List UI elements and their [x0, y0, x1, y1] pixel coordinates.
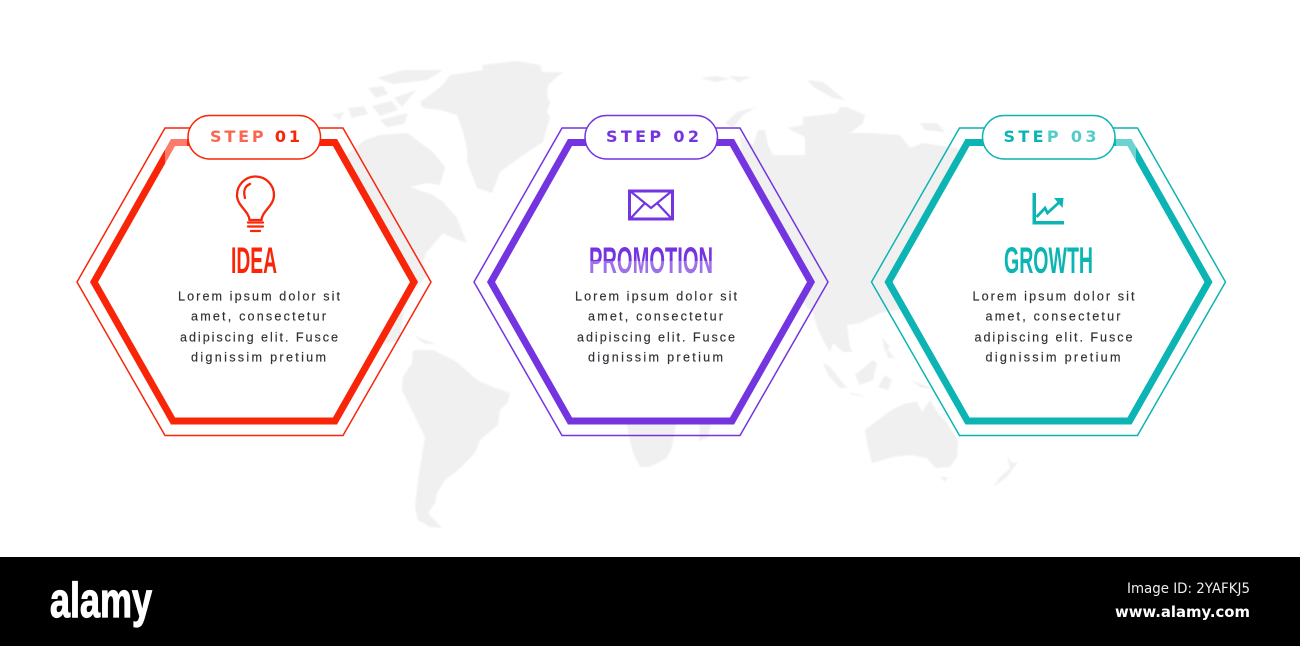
description text: amet, consectetur: [588, 310, 723, 324]
description text: adipiscing elit. Fusce: [974, 330, 1132, 344]
description text: Lorem ipsum dolor sit: [972, 290, 1135, 304]
description text: [972, 290, 1135, 364]
outer hexagon outline: [77, 128, 431, 436]
description text: Lorem ipsum dolor sit: [575, 290, 738, 304]
panel: step 02 promotion: [474, 116, 828, 436]
panel: step 03 growth: [872, 116, 1226, 436]
step pill: STEP 03: [1004, 127, 1096, 146]
description text: amet, consectetur: [191, 310, 326, 324]
description text: Lorem ipsum dolor sit: [178, 290, 340, 304]
footer bar: [0, 557, 1300, 646]
inner hexagon frame: [94, 142, 414, 421]
step pill: STEP 01: [210, 127, 300, 146]
alamy logo: alamy: [50, 574, 152, 628]
description text: dignissim pretium: [986, 350, 1120, 364]
watermark fade overlays: [165, 128, 1136, 275]
website: www.alamy.com: [1115, 603, 1250, 621]
description text: adipiscing elit. Fusce: [180, 330, 338, 344]
icon: light bulb: [237, 176, 274, 231]
step pill: [585, 116, 718, 159]
heading: idea: IDEA: [231, 239, 277, 281]
outer hexagon outline: [872, 128, 1226, 436]
description text: dignissim pretium: [588, 350, 723, 364]
inner hexagon frame: [888, 142, 1208, 421]
step pill: STEP 02: [606, 127, 699, 146]
heading: promotion: PROMOTION: [589, 239, 713, 281]
step pill: [188, 116, 320, 159]
description text: amet, consectetur: [986, 310, 1120, 324]
inner hexagon frame: [491, 142, 811, 421]
outer hexagon outline: [474, 128, 828, 436]
description text: [575, 290, 738, 364]
world map background: [330, 61, 1018, 528]
description text: adipiscing elit. Fusce: [577, 330, 735, 344]
description text: dignissim pretium: [191, 350, 326, 364]
icon: envelope: [630, 191, 672, 219]
icon: growth chart: [1032, 193, 1064, 224]
image id: Image ID: 2YAFKJ5: [1127, 581, 1250, 597]
heading: growth: GROWTH: [1004, 239, 1093, 281]
panel: step 01 idea: [77, 116, 431, 436]
description text: [178, 290, 340, 364]
step pill: [982, 116, 1115, 159]
